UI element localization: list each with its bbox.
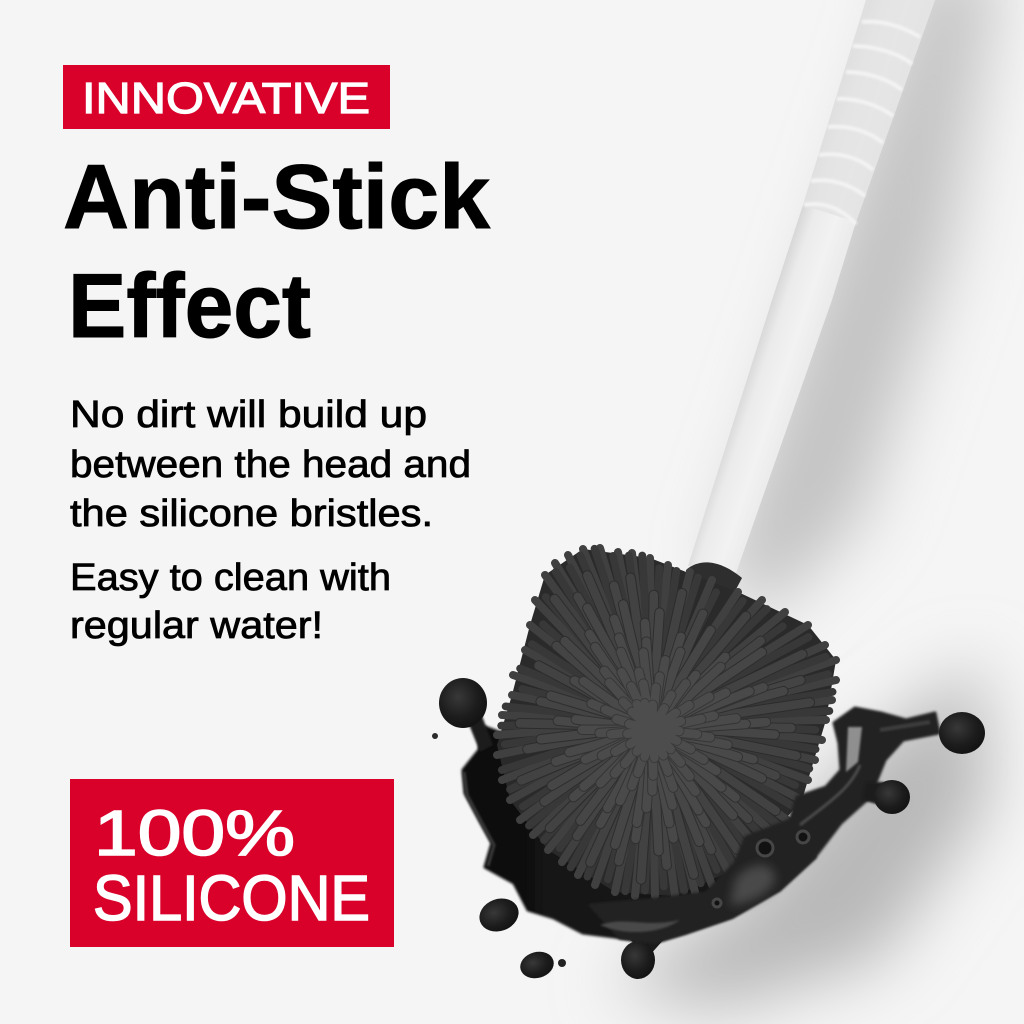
description paragraph 2: regular water!	[70, 605, 323, 647]
title: Effect	[68, 256, 311, 357]
badge: 100% silicone: SILICONE	[93, 862, 370, 934]
description paragraph 1: No dirt will build up	[70, 394, 427, 436]
bristle layers	[492, 544, 840, 903]
neck collar	[686, 562, 742, 610]
neck to top-left droplet	[468, 716, 493, 752]
handle	[688, 0, 935, 576]
brush head with silicone bristles	[492, 544, 840, 903]
droplet: bottom centre	[621, 938, 665, 979]
title: Anti-Stick	[63, 147, 490, 248]
badge: innovative: INNOVATIVE	[82, 74, 370, 123]
droplet: right tip	[939, 712, 985, 754]
bristle base	[497, 549, 836, 896]
droplet: bottom small	[517, 948, 557, 982]
badge: 100% silicone: 100%	[94, 797, 295, 869]
description paragraph 2	[70, 557, 391, 647]
badge: innovative	[63, 65, 390, 129]
droplet: top left	[439, 678, 487, 728]
title	[63, 147, 490, 357]
handle grip ribs	[803, 0, 935, 222]
droplet: tiny left	[432, 733, 438, 739]
badge: 100% silicone	[70, 779, 394, 947]
cast shadow of brush	[610, 0, 1000, 1010]
description paragraph 1: between the head and	[70, 444, 471, 486]
description paragraph 2: Easy to clean with	[70, 557, 391, 599]
description paragraph 1: the silicone bristles.	[70, 493, 433, 535]
splash bubbles	[713, 831, 809, 907]
droplet: right middle	[862, 780, 910, 814]
droplet: tiny bottom	[558, 959, 566, 967]
description paragraph 1	[70, 394, 471, 535]
arm highlights	[730, 865, 775, 905]
droplet: lower left	[475, 893, 523, 937]
ink splash: front arm	[590, 708, 985, 942]
ink splash: back pool	[432, 678, 815, 982]
